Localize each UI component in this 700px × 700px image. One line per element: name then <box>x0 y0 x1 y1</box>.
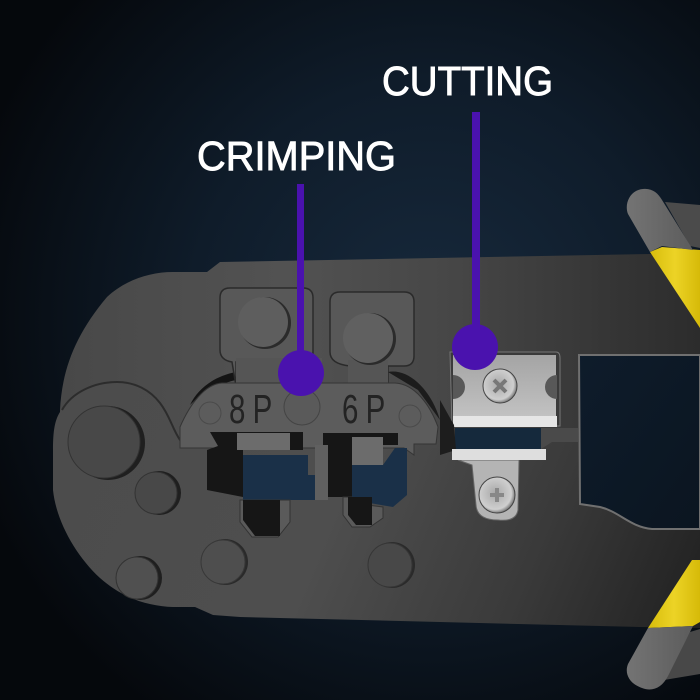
cutting blades <box>440 352 578 520</box>
8P cavity <box>207 432 303 497</box>
crimp buttons <box>190 288 440 420</box>
upper blade <box>450 352 560 426</box>
callout: crimping <box>197 133 396 396</box>
crimp die <box>180 383 438 455</box>
blade gap <box>455 428 541 449</box>
6P cavity <box>323 433 398 497</box>
crimp cavities <box>207 432 407 537</box>
callout: cutting <box>382 58 553 370</box>
lower blade <box>458 460 519 520</box>
handle: upper <box>627 189 700 328</box>
central column <box>315 445 328 500</box>
tool body <box>53 254 700 628</box>
handle: lower <box>627 560 700 690</box>
main lower plate <box>53 382 700 628</box>
rivets <box>68 406 415 600</box>
screw: upper <box>483 369 517 403</box>
die label: 6P: 6P <box>342 386 393 432</box>
label: cutting: CUTTING <box>382 58 553 104</box>
screw: lower <box>479 477 515 513</box>
window <box>579 355 700 529</box>
die label: 8P: 8P <box>229 386 280 432</box>
top highlight <box>560 266 650 268</box>
upper jaw plate <box>60 254 700 450</box>
plate edge <box>62 382 186 445</box>
label: crimping: CRIMPING <box>197 133 396 179</box>
